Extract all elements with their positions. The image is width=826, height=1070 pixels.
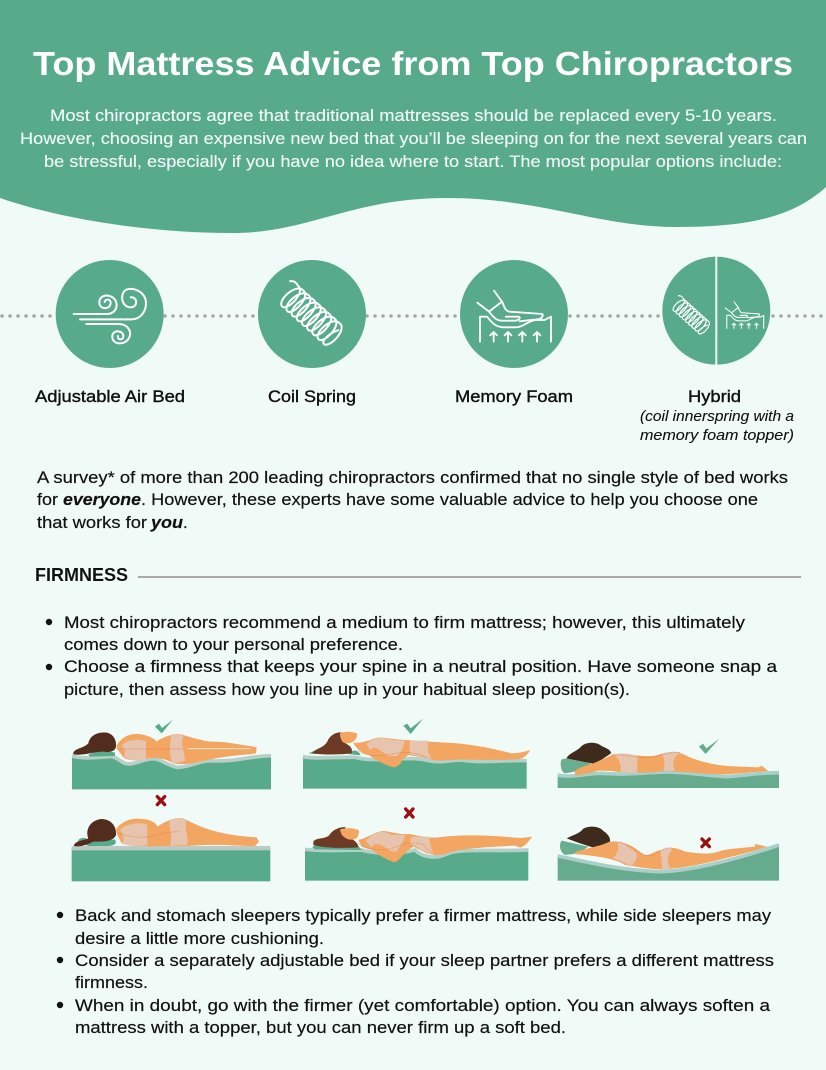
icon: hybrid	[662, 256, 770, 365]
label: coil spring: Coil Spring	[268, 387, 356, 406]
survey text block: you	[150, 514, 183, 532]
intro text: Most chiropractors agree that traditional mattresses should be replaced every 5-10 years.	[50, 107, 777, 125]
bullet list: sleeper tips: Consider a separately adjustable bed if your sleep partner prefers a different mattress	[75, 952, 774, 970]
heading: firmness: FIRMNESS	[35, 564, 128, 585]
survey text block: . However, these experts have some valuable advice to help you choose one	[141, 491, 758, 509]
bullet list: firmness advice: Most chiropractors recommend a medium to firm mattress; however, this ultimately	[64, 614, 746, 632]
label: hybrid: memory foam topper)	[640, 428, 794, 444]
bullet list: sleeper tips: desire a little more cushioning.	[75, 930, 324, 948]
illustration: side sleeper bad	[72, 797, 270, 881]
label: hybrid: Hybrid	[688, 387, 741, 406]
bullet list: sleeper tips: firmness.	[75, 974, 148, 992]
title: Top Mattress Advice from Top Chiropractors	[33, 45, 793, 82]
bullet list: firmness advice	[46, 614, 778, 699]
survey text block: .	[183, 514, 188, 532]
bullet list: firmness advice: Choose a firmness that keeps your spine in a neutral position. Have someone snap a	[64, 658, 778, 676]
illustration: back sleeper bad	[305, 809, 532, 881]
survey text block: that works for	[37, 514, 148, 532]
illustration: back sleeper good	[303, 718, 530, 789]
bullet list: sleeper tips	[57, 907, 774, 1037]
bullet list: firmness advice: comes down to your personal preference.	[64, 636, 403, 654]
intro text: However, choosing an expensive new bed that you’ll be sleeping on for the next several years can	[20, 130, 807, 148]
label: memory foam: Memory Foam	[455, 387, 573, 406]
survey text block: A survey* of more than 200 leading chiropractors confirmed that no single style of bed works	[37, 469, 788, 487]
bullet list: sleeper tips: mattress with a topper, but you can never firm up a soft bed.	[75, 1019, 566, 1037]
bullet list: sleeper tips: When in doubt, go with the firmer (yet comfortable) option. You can always soften a	[75, 997, 771, 1015]
illustration: stomach sleeper bad	[558, 827, 779, 881]
icon: memory foam	[460, 260, 568, 368]
illustration: stomach sleeper good	[558, 739, 779, 788]
icon: air bed wind	[56, 260, 164, 368]
intro text	[20, 107, 807, 171]
label: adjustable air bed: Adjustable Air Bed	[35, 387, 185, 406]
label: hybrid	[640, 387, 794, 444]
survey text block: everyone	[63, 491, 141, 509]
illustration: side sleeper good	[72, 720, 271, 789]
panel: header banner	[0, 0, 826, 233]
intro text: be stressful, especially if you have no idea where to start. The most popular options include:	[44, 153, 782, 171]
label: hybrid: (coil innerspring with a	[640, 409, 794, 425]
survey text block: for	[37, 491, 59, 509]
bullet list: firmness advice: picture, then assess how you line up in your habitual sleep position(s).	[64, 681, 630, 699]
icon: coil spring	[258, 260, 366, 368]
survey text block	[37, 469, 788, 532]
bullet list: sleeper tips: Back and stomach sleepers typically prefer a firmer mattress, while side sleepers may	[75, 907, 772, 925]
